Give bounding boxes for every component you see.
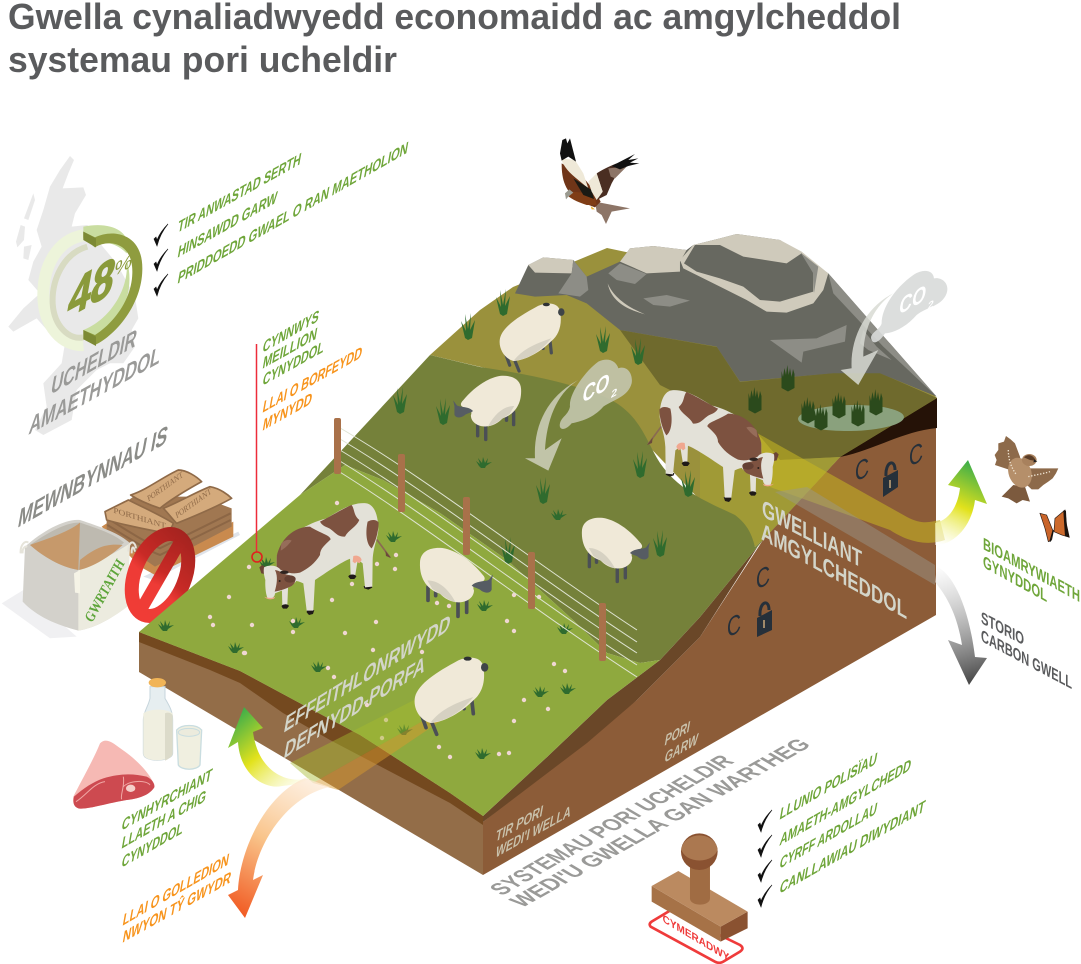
text: carbon storage: STORIO bbox=[981, 608, 1024, 649]
sack label: PORTHIANT bbox=[146, 469, 184, 503]
callout: red pointer to clover bbox=[252, 344, 262, 562]
pond bbox=[798, 404, 904, 432]
block: dark strip on right face bbox=[483, 457, 840, 822]
icon: 48% ring bbox=[43, 225, 142, 346]
text: pasture use efficiency: DEFNYDD-PORFA bbox=[282, 650, 428, 764]
percent sign: % bbox=[112, 248, 134, 281]
block: soil right face bbox=[483, 398, 936, 875]
text: lower inputs: MEWNBYNNAU IS bbox=[16, 419, 170, 534]
checklist: policy: LLUNIO POLISÏAU bbox=[778, 748, 879, 824]
text: fewer greenhouse gas losses: NWYON TŶ GWYDR bbox=[121, 867, 233, 947]
ring: inner shading bbox=[53, 247, 87, 338]
icon: CO2 cloud and arrow on moorland: CO bbox=[897, 280, 928, 321]
checklist: upland conditions: HINSAWDD GARW bbox=[176, 187, 279, 262]
icon: carbon symbols and locks bbox=[727, 437, 923, 645]
sheep: pasture by fence bbox=[420, 548, 493, 616]
sheep: front pasture bbox=[415, 657, 488, 734]
text: carbon storage bbox=[981, 608, 1072, 693]
rocky outcrop bbox=[515, 234, 937, 397]
pasture flowers bbox=[208, 501, 567, 759]
reeds bbox=[748, 365, 882, 430]
grass tufts tall bbox=[393, 289, 695, 564]
text: improved systems caption: SYSTEMAU PORI UCHELDIR bbox=[485, 752, 740, 899]
ring: arc ends bbox=[83, 232, 96, 346]
checklist: upland conditions: TIR ANWASTAD SERTH bbox=[176, 148, 303, 237]
text: pasture use efficiency: EFFEITHLONRWYDD bbox=[282, 608, 453, 738]
sack label: PORTHIANT bbox=[113, 506, 166, 530]
callout: clover text: LLAI O BORFEYDD bbox=[261, 342, 364, 417]
icon: CO2 cloud and arrow on moorland bbox=[841, 271, 947, 385]
hillside: dark moorland bbox=[620, 330, 937, 460]
hillside: improved pasture bbox=[139, 465, 660, 816]
text: environmental improvement: GWELLIANT bbox=[762, 495, 862, 574]
title bbox=[8, 0, 901, 80]
text: fewer greenhouse gas losses: LLAI O GOLLEDION bbox=[121, 849, 231, 930]
text: environmental improvement: AMGYLCHEDDOL bbox=[761, 518, 907, 625]
icon: milk bottle and glass bbox=[143, 678, 202, 769]
icon: carbon symbols and locks: C bbox=[909, 437, 923, 474]
arrow: biodiversity up bbox=[935, 460, 987, 545]
block: soil left face bbox=[139, 632, 483, 875]
hillside: lower yellow-green wedge bbox=[700, 433, 840, 547]
sack label: PORTHIANT bbox=[175, 486, 212, 520]
icon: meat joint bbox=[73, 741, 154, 809]
ring: 48 per cent arc bbox=[83, 232, 142, 345]
text: upland label bbox=[27, 322, 163, 441]
icon: CO2 cloud and arrow on hillside bbox=[525, 360, 632, 471]
fence posts bbox=[334, 418, 606, 661]
icon: red kite bbox=[560, 138, 639, 224]
callout: clover text bbox=[261, 305, 364, 435]
icon: carbon symbols and locks: C bbox=[727, 608, 741, 645]
icon: CO2 cloud and arrow on moorland: 2 bbox=[927, 298, 934, 313]
icon: prohibition sign bbox=[121, 526, 199, 624]
text: rough grazing: PORI bbox=[663, 717, 692, 750]
icon: fertiliser bag bbox=[2, 520, 136, 638]
sheep: upper hill bbox=[500, 303, 565, 371]
band: green food production flow bbox=[290, 697, 437, 783]
band: orange emissions flow bbox=[313, 710, 457, 790]
icon: approval stamp bbox=[650, 833, 748, 964]
text: rough grazing: GARW bbox=[663, 729, 700, 767]
checklist: policy: AMAETH-AMGYLCHEDD bbox=[778, 754, 913, 850]
ring: pale remainder bbox=[43, 235, 83, 345]
text: fewer greenhouse gas losses bbox=[121, 849, 233, 947]
text: milk and meat production bbox=[120, 764, 214, 872]
callout: clover text: MEILLION bbox=[261, 323, 319, 373]
text: upland label: AMAETHYDDOL bbox=[27, 340, 163, 441]
title: systemau pori ucheldir bbox=[8, 39, 397, 80]
checklist: policy: CANLLAWIAU DIWYDIANT bbox=[778, 795, 927, 898]
checklist: policy bbox=[758, 748, 927, 907]
text: improved grazing land: TIR PORI bbox=[494, 801, 545, 846]
icon: feed sacks on pallet bbox=[102, 469, 240, 580]
number: 48 bbox=[64, 244, 120, 330]
text: biodiversity: GYNYDDOL bbox=[983, 551, 1047, 606]
band: yellow environmental flow bbox=[757, 433, 945, 543]
callout: clover text: CYNYDDOL bbox=[261, 336, 326, 390]
text: rough grazing bbox=[663, 717, 700, 767]
bag label: GWRTAITH bbox=[81, 556, 128, 625]
ring: inner crescent bbox=[83, 225, 129, 340]
icon: CO2 cloud and arrow on hillside: CO bbox=[581, 368, 611, 409]
sheep: facing left bbox=[453, 376, 521, 439]
text: improved grazing land bbox=[494, 801, 573, 862]
checklist: policy: CYRFF ARDOLLAU bbox=[778, 798, 879, 873]
checklist: upland conditions: PRIDDOEDD GWAEL O RAN MAETHOLION bbox=[176, 137, 410, 288]
icon: sparrow bbox=[995, 436, 1058, 503]
text: milk and meat production: CYNYDDOL bbox=[120, 818, 185, 872]
grass tufts small bbox=[158, 457, 576, 759]
fence wires bbox=[335, 425, 637, 677]
icon: map of upland Britain bbox=[8, 156, 138, 435]
text: improved systems caption: WEDI'U GWELLA GAN WARTHEG bbox=[505, 735, 817, 911]
icon: CO2 cloud and arrow on hillside: 2 bbox=[610, 387, 618, 401]
text: milk and meat production: LLAETH A CHIG bbox=[120, 785, 208, 853]
cow: upper hill bbox=[647, 390, 779, 502]
band: grey carbon flow bbox=[775, 487, 935, 585]
icon: carbon symbols and locks: C bbox=[756, 560, 770, 597]
hillside: upper field bbox=[430, 248, 937, 540]
hillside: improved rough field bbox=[300, 355, 763, 663]
text: upland label: UCHELDIR bbox=[49, 322, 139, 401]
arrow: reduced greenhouse gases bbox=[228, 778, 330, 918]
text: milk and meat production: CYNHYRCHIANT bbox=[120, 764, 214, 835]
icon: carbon symbols and locks: C bbox=[855, 452, 869, 489]
arrow: milk and meat production bbox=[228, 707, 310, 787]
checklist: upland conditions bbox=[154, 137, 410, 296]
sheep: improved field bbox=[582, 518, 650, 581]
callout: clover text: MYNYDD bbox=[261, 388, 314, 435]
block: dark soil strip on left face bbox=[139, 632, 483, 825]
arrow: carbon storage down bbox=[935, 567, 987, 685]
text: improved grazing land: WEDI'I WELLA bbox=[494, 801, 573, 862]
block: peat layer bbox=[840, 398, 937, 457]
callout: clover text: CYNNWYS bbox=[261, 305, 321, 357]
icon: butterfly bbox=[1040, 510, 1069, 542]
cow: front pasture bbox=[259, 503, 391, 615]
